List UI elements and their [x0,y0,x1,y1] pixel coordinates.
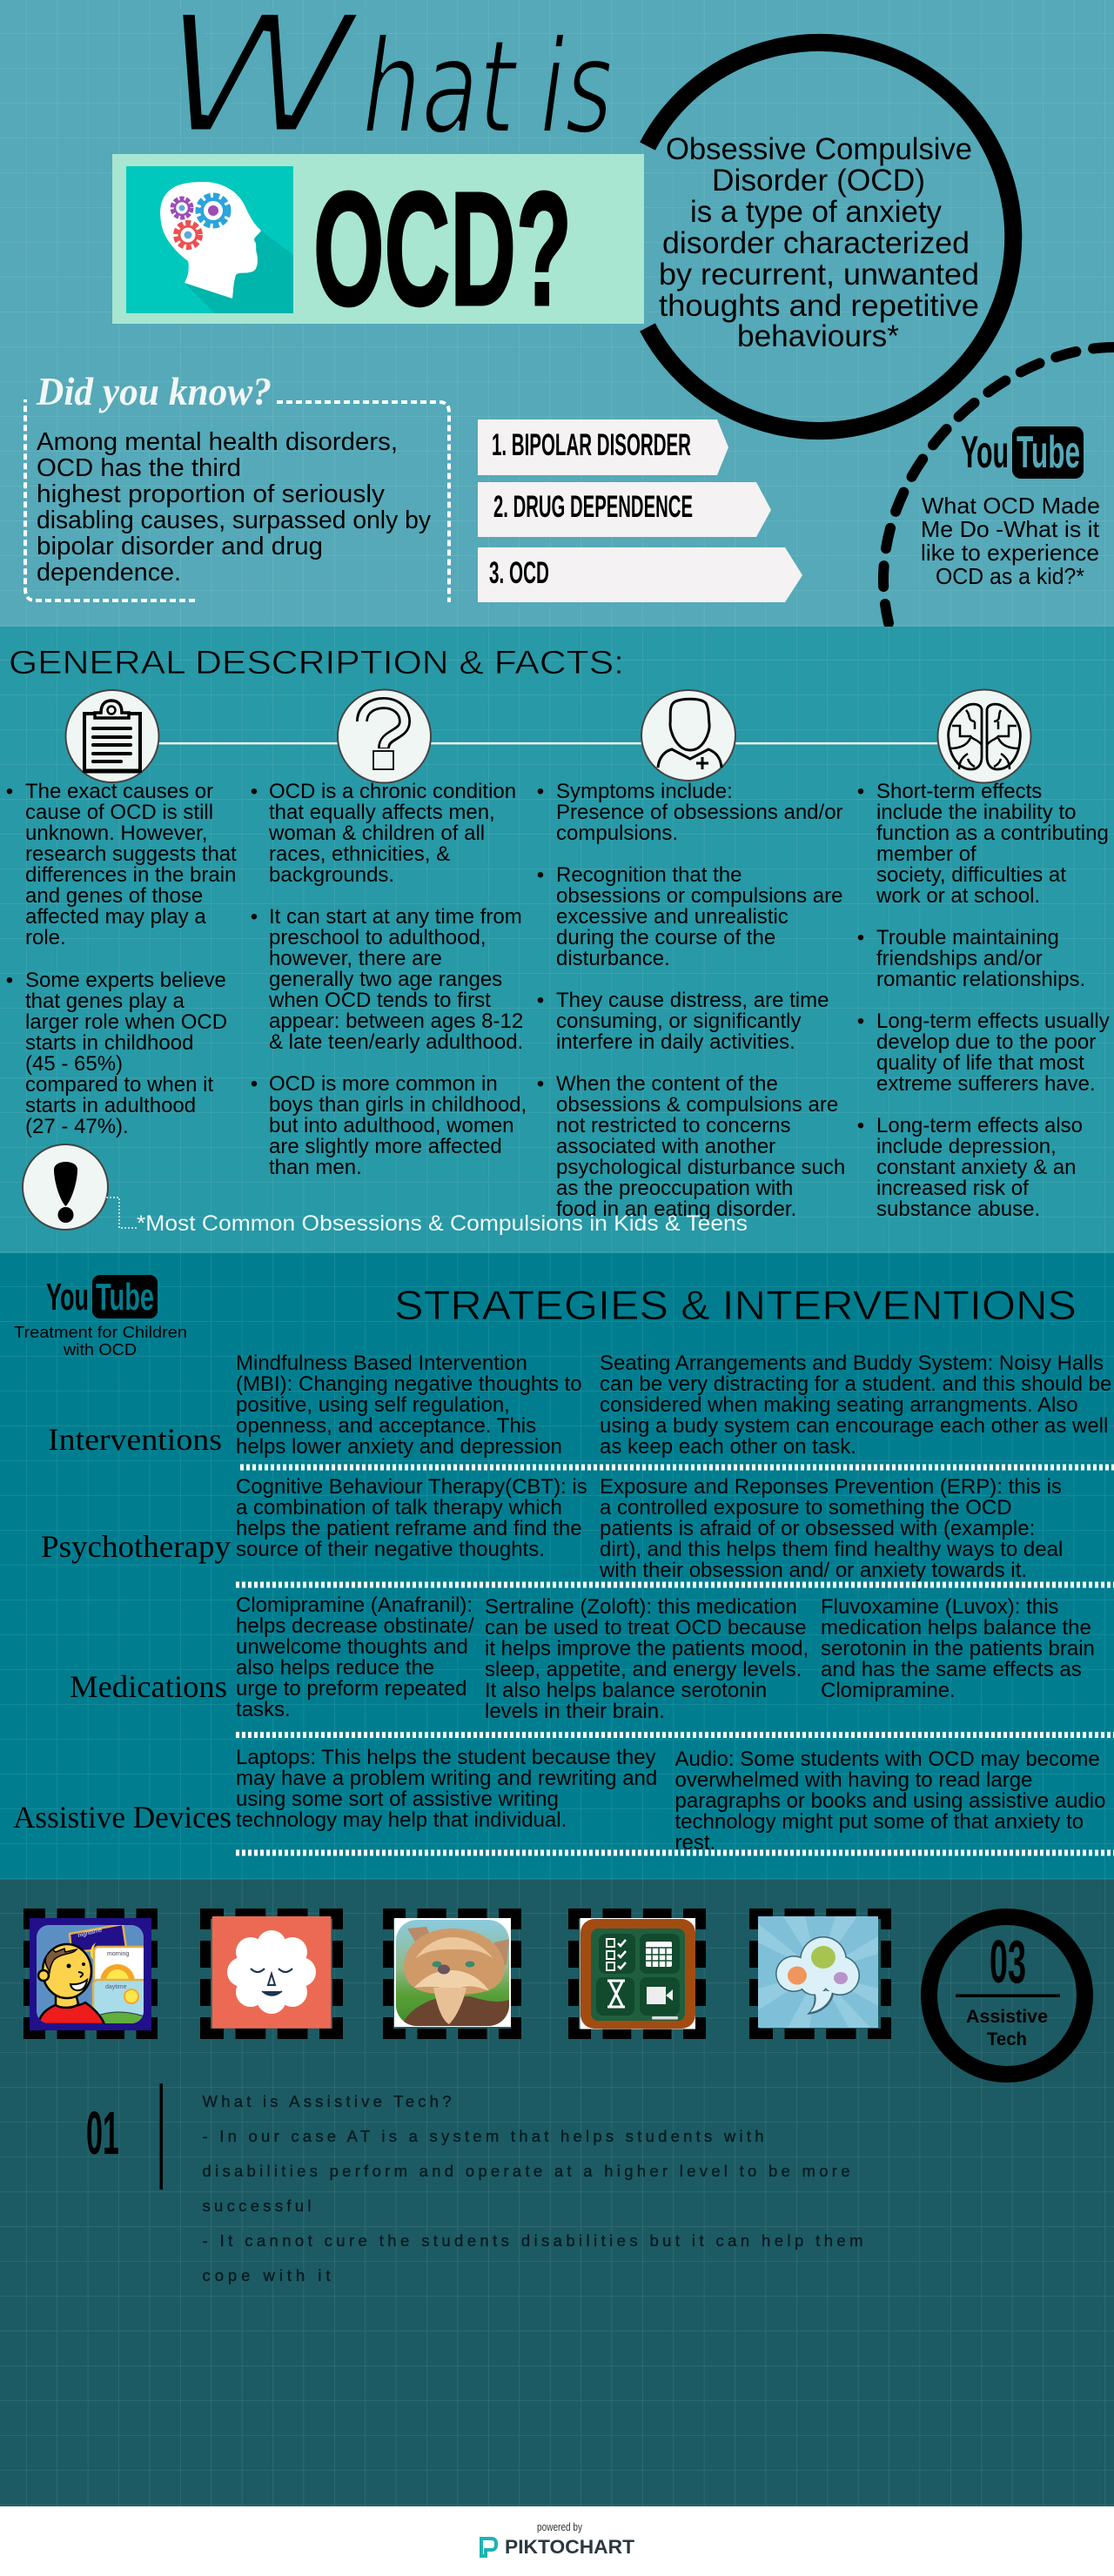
column: effects [857,780,1110,1221]
text: laptops: Laptops: This helps the student because they [236,1746,656,1769]
icon: exclamation mark [23,1144,108,1230]
text: mindfulness based intervention: (MBI): Changing negative thoughts to [236,1372,582,1396]
text: did you know body: Among mental health disorders, [37,428,398,456]
column: causes: cause of OCD is still [25,801,213,824]
column: prevalence: than men. [269,1156,362,1179]
column: symptoms: excessive and unrealistic [556,905,789,929]
column: symptoms: When the content of the [556,1072,778,1096]
row label: Assistive Devices: Assistive Devices [13,1800,232,1835]
text: video caption: like to experience [921,540,1099,566]
badge: 03 assistive tech: Tech [987,2029,1027,2049]
column: causes: (27 - 47%). [25,1115,129,1138]
text: what is assistive tech: successful [202,2197,312,2215]
text: audio: technology might put some of that anxiety to [675,1810,1084,1834]
column: prevalence: & late teen/early adulthood. [269,1030,523,1054]
text: video caption: with OCD [63,1340,137,1358]
icon: head with gears [126,166,293,313]
text: fluvoxamine: Clomipramine. [821,1679,956,1702]
text: exposure and response prevention: with their obsession and/ or anxiety towards it. [599,1559,1027,1582]
column: effects: • [857,1114,864,1137]
icon: YouTube logo: Tube [96,1276,154,1318]
badge: 03 assistive tech [929,1916,1084,2075]
footer: powered by Piktochart: PIKTOCHART [505,2536,635,2558]
text: fluvoxamine: medication helps balance the [821,1616,1091,1640]
column: prevalence: OCD is more common in [269,1072,498,1096]
speech cloud shape [775,1936,860,2015]
text: laptops: may have a problem writing and rewriting and [236,1767,657,1790]
row label: Interventions: Interventions [48,1422,222,1457]
timeline connector [157,742,940,744]
column: causes: role. [25,926,66,949]
text: OCD definition [659,132,979,353]
text: what is assistive tech [202,2092,863,2284]
icon: person with plus [641,690,735,781]
text: fluvoxamine: and has the same effects as [821,1658,1082,1681]
column: symptoms: Presence of obsessions and/or [556,801,843,824]
text: laptops: using some sort of assistive writing [236,1788,559,1811]
text: video caption: Me Do -What is it [921,516,1100,542]
column: symptoms: Recognition that the [556,863,742,887]
text: sertraline: can be used to treat OCD because [485,1616,807,1640]
column: symptoms [537,780,845,1221]
column: causes: Some experts believe [25,969,226,992]
column: prevalence: It can start at any time from [269,905,522,929]
column: effects: Long-term effects usually [876,1010,1110,1033]
text: did you know body: highest proportion of seriously [37,480,386,508]
column: causes: larger role when OCD [25,1010,227,1034]
arrow banner: 1 bipolar disorder: 1. BIPOLAR DISORDER [492,428,691,462]
text: laptops: technology may help that individual. [236,1808,567,1832]
heading: general description: GENERAL DESCRIPTION & FACTS: [9,645,624,681]
column: prevalence: however, there are [269,947,442,970]
column: effects: society, difficulties at [876,863,1066,887]
column: symptoms: • [537,863,544,887]
icon: YouTube logo [46,1275,158,1318]
text: fluvoxamine: Fluvoxamine (Luvox): this [821,1595,1058,1619]
column: prevalence: backgrounds. [269,863,394,887]
column: prevalence: appear: between ages 8-12 [269,1010,523,1033]
column: symptoms: psychological disturbance such [556,1156,845,1179]
heading: did you know: Did you know? [36,369,272,413]
column: symptoms: • [537,1072,544,1096]
column: symptoms: associated with another [556,1135,775,1158]
text: sertraline: It also helps balance serotonin [485,1679,767,1702]
text: OCD definition: is a type of anxiety [690,195,942,229]
icon: Piktochart logo [481,2539,496,2556]
text: video caption [14,1323,187,1358]
icon: clipboard [66,690,158,782]
divider bar [160,2083,163,2190]
column: symptoms: as the preoccupation with [556,1177,793,1200]
text: what is assistive tech: disabilities perform and operate at a higher level to be more [202,2162,850,2180]
column: causes: • [6,969,13,992]
footer: powered by Piktochart: powered by [537,2521,583,2533]
column: prevalence: generally two age ranges [269,968,502,991]
connector to footnote [106,1197,137,1228]
column: symptoms: not restricted to concerns [556,1114,790,1137]
text: clomipramine: Clomipramine (Anafranil): [236,1593,473,1617]
text: did you know body [37,428,431,587]
column: symptoms: during the course of the [556,926,775,949]
text: sertraline: Sertraline (Zoloft): this medication [485,1595,797,1619]
panel: strategies and interventions [0,1253,1114,1880]
text: video caption: Treatment for Children [14,1323,187,1341]
text: did you know body: OCD has the third [37,454,241,482]
column: causes [6,780,237,1138]
icon: YouTube logo: You [46,1276,89,1318]
column: prevalence: • [251,780,258,803]
column: causes: and genes of those [25,884,203,908]
column: effects: quality of life that most [876,1051,1084,1075]
arrow banner: 3 OCD: 3. OCD [489,556,549,590]
row label: Psychotherapy: Psychotherapy [41,1529,231,1564]
column: effects: develop due to the poor [876,1030,1096,1054]
text: audio: overwhelmed with having to read large [675,1768,1032,1792]
column: prevalence: are slightly more affected [269,1135,502,1158]
column: prevalence: races, ethnicities, & [269,842,450,866]
text: seating arrangements: using a budy system can encourage each other as well [600,1414,1108,1438]
app tile: routine cards [23,1909,158,2039]
column: symptoms: Symptoms include: [556,780,733,803]
row label: Medications: Medications [70,1669,227,1704]
icon: YouTube logo [961,426,1084,479]
text: audio: Audio: Some students with OCD may become [675,1748,1100,1771]
heading: strategies and interventions: STRATEGIES & INTERVENTIONS [394,1282,1077,1328]
app tile: speech cloud [749,1909,891,2039]
text: cognitive behaviour therapy: helps the patient reframe and find the [236,1517,582,1540]
text: cognitive behaviour therapy: a combination of talk therapy which [236,1496,562,1519]
column: effects: include depression, [876,1135,1057,1158]
column: prevalence: OCD is a chronic condition [269,780,516,803]
text: mindfulness based intervention: openness, and acceptance. This [236,1414,536,1438]
text: what is assistive tech: What is Assistive Tech? [202,2092,451,2110]
column: symptoms: consuming, or significantly [556,1010,801,1033]
column: prevalence: • [251,905,258,929]
text: exposure and response prevention: a controlled exposure to something the OCD [600,1496,1012,1519]
arrow banner: 2 drug dependence [478,482,771,537]
text: mindfulness based intervention: helps lower anxiety and depression [236,1435,562,1459]
column: symptoms: • [537,780,544,803]
text: clomipramine: also helps reduce the [236,1656,434,1680]
column: effects: substance abuse. [876,1197,1040,1221]
title: What is: is [540,12,613,164]
column: prevalence: • [251,1072,258,1096]
column: effects: include the inability to [876,801,1076,824]
column: effects: Long-term effects also [876,1114,1083,1137]
column: effects: member of [876,842,976,866]
text: clomipramine: tasks. [236,1698,291,1721]
text: sertraline: sleep, appetite, and energy levels. [485,1658,802,1681]
column: effects: function as a contributing [876,822,1109,845]
column: symptoms: They cause distress, are time [556,989,829,1012]
text: video caption: OCD as a kid?* [936,563,1084,589]
column: causes: unknown. However, [25,822,207,845]
panel: assistive tech: 01 [86,2099,119,2167]
column: effects: friendships and/or [876,947,1043,970]
column: prevalence: when OCD tends to first [268,989,491,1012]
text: exposure and response prevention: patients is afraid of or obsessed with (example: [600,1517,1035,1540]
column: prevalence [251,780,527,1179]
text: mindfulness based intervention: Mindfulness Based Intervention [236,1352,527,1375]
column: symptoms: compulsions. [556,822,678,845]
column: prevalence: but into adulthood, women [269,1114,514,1137]
column: effects: increased risk of [876,1177,1029,1200]
text: audio: paragraphs or books and using assistive audio [675,1789,1105,1813]
column: causes: The exact causes or [25,780,213,803]
column: causes: compared to when it [25,1073,213,1097]
text: audio: rest. [675,1831,715,1855]
column: symptoms: interfere in daily activities. [556,1030,795,1054]
text: OCD definition: Disorder (OCD) [712,164,925,198]
text: video caption: What OCD Made [922,493,1100,519]
dashed arc [883,347,1114,623]
column: symptoms: obsessions or compulsions are [556,884,842,908]
column: effects: constant anxiety & an [876,1156,1076,1179]
column: effects: Trouble maintaining [876,926,1059,949]
panel: assistive tech [0,1880,1114,2506]
app tile: routine cards: daytime [105,1984,127,1990]
column: causes: starts in childhood [25,1031,193,1055]
column: effects: • [857,1010,864,1033]
column: symptoms: obsessions & compulsions are [556,1093,838,1117]
badge: 03 assistive tech: 03 [990,1928,1026,1996]
column: effects: • [857,780,864,803]
column: effects: work or at school. [876,884,1040,908]
column: causes: (45 - 65%) [25,1052,123,1076]
text: OCD definition: thoughts and repetitive [659,289,979,323]
banner: OCD title box [112,154,644,339]
text: what is assistive tech: - In our case AT is a system that helps students with [202,2127,764,2145]
app tile: routine cards: nighttime [77,1927,103,1939]
text: did you know body: dependence. [37,559,181,587]
text: video caption [921,493,1100,589]
app tile: breathing cloud [200,1909,343,2039]
text: seating arrangements: can be very distracting for a student. and this should be [600,1372,1111,1396]
text: clomipramine: unwelcome thoughts and [236,1635,468,1659]
column: causes: starts in adulthood [25,1094,196,1117]
column: symptoms: food in an eating disorder. [556,1197,796,1221]
callout: did you know [25,369,449,602]
column: prevalence: that equally affects men, [269,801,495,824]
icon: YouTube logo: You [961,427,1009,478]
footer: powered by Piktochart [0,2506,1114,2576]
text: sertraline: levels in their brain. [485,1700,665,1723]
column: effects: Short-term effects [876,780,1042,803]
text: what is assistive tech: cope with it [202,2266,331,2284]
arrow banner: 2 drug dependence: 2. DRUG DEPENDENCE [493,490,693,524]
column: effects: extreme sufferers have. [876,1072,1096,1096]
panel: header, what is OCD [0,0,1114,627]
text: clomipramine: helps decrease obstinate/ [236,1614,474,1638]
column: prevalence: boys than girls in childhood, [269,1093,527,1117]
column: symptoms: disturbance. [556,947,670,970]
text: OCD definition: behaviours* [737,319,899,353]
text: did you know body: disabling causes, surpassed only by [37,506,431,534]
arrow banner: 3 OCD [478,547,802,602]
panel: general description and facts [0,627,1114,1253]
column: causes: affected may play a [25,905,206,929]
text: seating arrangements: considered when making seating arrangments. Also [600,1393,1078,1417]
column: effects: • [857,926,864,949]
text: what is assistive tech: - It cannot cure the students disabilities but it can help them [202,2231,863,2250]
icon: question mark [338,689,431,783]
text: clomipramine: urge to preform repeated [236,1677,466,1701]
app tile: chalkboard schedule [568,1909,706,2039]
column: effects: romantic relationships. [876,968,1085,991]
app tile: routine cards: morning [107,1951,129,1957]
arrow banner: 1 bipolar disorder [478,419,728,475]
badge: 03 assistive tech: Assistive [966,2007,1048,2027]
column: symptoms: • [537,989,544,1012]
text: cognitive behaviour therapy: source of their negative thoughts. [236,1538,545,1561]
heading: OCD?: OCD? [313,159,572,339]
column: causes: differences in the brain [25,863,236,887]
text: did you know body: bipolar disorder and drug [37,533,323,560]
column: causes: research suggests that [25,842,237,866]
icon: brain [938,689,1030,783]
text: OCD definition: by recurrent, unwanted [659,258,979,292]
text: seating arrangements: as keep each other on task. [600,1435,856,1459]
text: mindfulness based intervention: positive, using self regulation, [236,1393,510,1417]
text: sertraline: it helps improve the patients mood, [485,1637,809,1660]
column: causes: • [6,780,13,803]
footnote: common obsessions: *Most Common Obsessions & Compulsions in Kids & Teens [137,1211,748,1236]
text: cognitive behaviour therapy: Cognitive Behaviour Therapy(CBT): is [236,1475,587,1499]
column: prevalence: woman & children of all [268,822,485,845]
column: causes: that genes play a [25,989,185,1013]
text: exposure and response prevention: Exposure and Reponses Prevention (ERP): this is [600,1475,1062,1499]
column: prevalence: preschool to adulthood, [269,926,487,949]
app tile: dog character [383,1909,521,2039]
text: OCD definition: disorder characterized [662,226,970,260]
title: What is: hat [362,12,519,164]
text: seating arrangements: Seating Arrangements and Buddy System: Noisy Halls [600,1352,1104,1375]
text: OCD definition: Obsessive Compulsive [666,132,972,166]
text: fluvoxamine: serotonin in the patients brain [821,1637,1095,1660]
circle ring around definition [648,43,1013,431]
text: exposure and response prevention: dirt), and this helps them find healthy ways to deal [600,1538,1063,1561]
